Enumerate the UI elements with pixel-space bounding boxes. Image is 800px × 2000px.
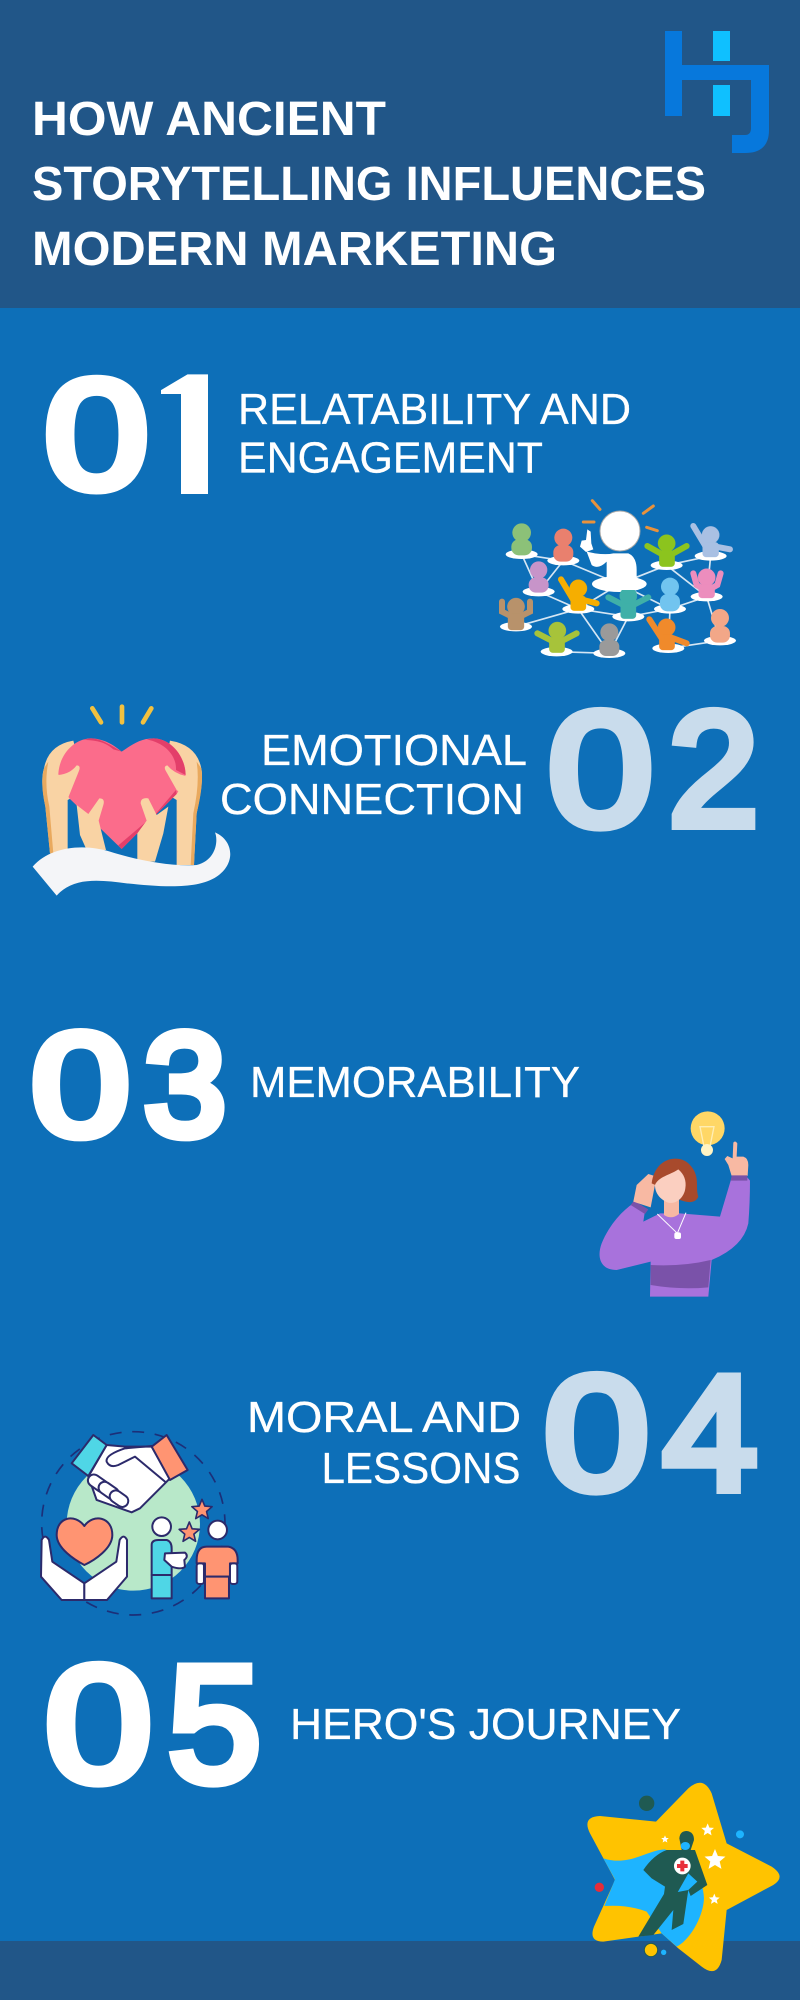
number 02 <box>548 679 758 860</box>
heading: relatability and engagement: ENGAGEMENT <box>238 434 543 482</box>
number 02: 2 <box>668 679 758 860</box>
number 01 <box>46 374 208 494</box>
number 01: 1 <box>144 348 244 521</box>
heading: moral and lessons <box>247 1394 521 1493</box>
number 04: 0 <box>544 1343 649 1524</box>
icon: people network <box>500 501 736 658</box>
section 01 <box>44 348 736 658</box>
footer band <box>0 1941 800 2000</box>
number 05: 0 <box>45 1632 152 1816</box>
section 04 <box>41 1343 757 1615</box>
heading: emotional connection: EMOTIONAL <box>261 727 527 775</box>
heading: relatability and engagement <box>238 386 631 482</box>
number 05 <box>45 1632 261 1816</box>
section 03 <box>32 1003 750 1297</box>
icon: hero on star <box>587 1783 780 1971</box>
section 05 <box>45 1632 780 1971</box>
header band <box>0 0 800 308</box>
title: MODERN MARKETING <box>32 223 557 276</box>
icon: handshake, care and people <box>41 1432 238 1615</box>
heading: relatability and engagement: RELATABILITY AND <box>238 386 631 434</box>
number 02: 0 <box>548 679 653 860</box>
section 02 <box>33 679 758 896</box>
heading: emotional connection <box>220 727 527 824</box>
number 04 <box>544 1343 757 1524</box>
heading: hero's journey: HERO'S JOURNEY <box>290 1701 681 1749</box>
logo: HJ monogram <box>665 31 769 153</box>
title: HOW ANCIENT <box>32 93 386 146</box>
heading: emotional connection: CONNECTION <box>220 776 524 824</box>
heading: moral and lessons: LESSONS <box>322 1445 520 1493</box>
number 03: 3 <box>144 1003 226 1166</box>
title: STORYTELLING INFLUENCES <box>32 158 706 211</box>
heading: memorability: MEMORABILITY <box>250 1059 580 1107</box>
number 03 <box>32 1003 226 1166</box>
number 01: 0 <box>44 348 148 521</box>
icon: hands holding heart <box>33 707 230 896</box>
title <box>32 93 706 276</box>
number 03: 0 <box>32 1003 130 1166</box>
heading: moral and lessons: MORAL AND <box>247 1394 521 1442</box>
number 04: 4 <box>663 1343 757 1524</box>
number 05: 5 <box>168 1632 261 1816</box>
icon: woman with lightbulb idea <box>600 1111 750 1297</box>
